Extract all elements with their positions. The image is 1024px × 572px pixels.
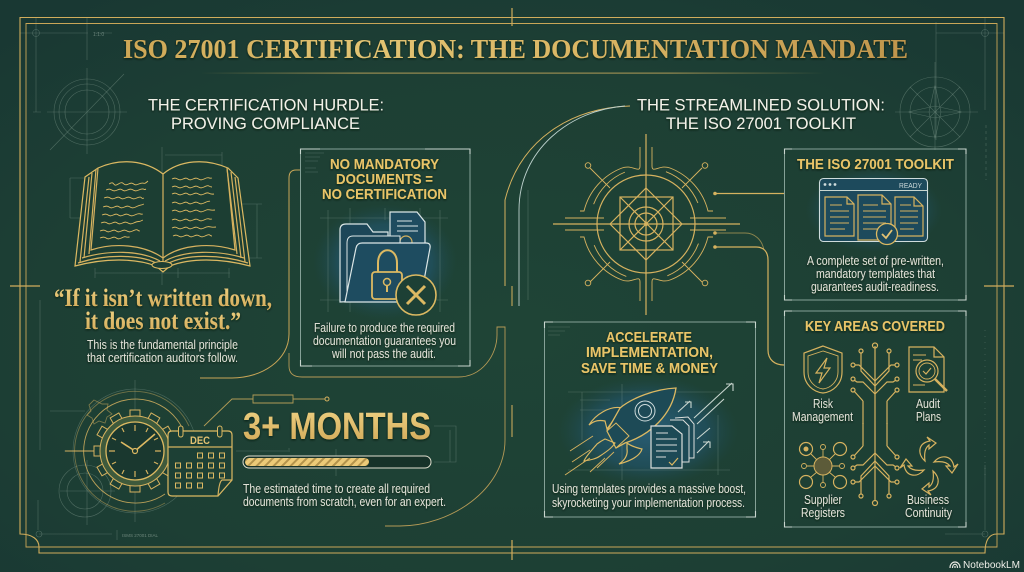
toolkit body text: A complete set of pre-written, (807, 254, 944, 268)
heading: streamlined solution: THE ISO 27001 TOOLKIT (666, 114, 856, 133)
accelerate body text (552, 482, 746, 510)
accelerate heading: SAVE TIME & MONEY (581, 360, 718, 377)
connector lines (200, 106, 784, 526)
quote: it does not exist.” (85, 308, 241, 335)
icon: audit document (909, 347, 947, 392)
icon: gear clock (64, 380, 205, 522)
toolkit body text (807, 254, 944, 294)
heading: certification hurdle: THE CERTIFICATION HURDLE: (148, 96, 384, 114)
label: audit plans (916, 397, 941, 424)
label: supplier registers: Supplier (804, 493, 842, 507)
circuit tree (851, 343, 899, 506)
icon: document window: READY (899, 183, 922, 190)
label: audit plans: Audit (916, 397, 940, 411)
icon: calendar DEC: DEC (190, 435, 210, 447)
label: risk management: Management (792, 410, 853, 424)
panel heading (322, 156, 447, 203)
toolkit heading: THE ISO 27001 TOOLKIT (797, 156, 954, 173)
toolkit body text: guarantees audit-readiness. (811, 280, 939, 294)
heading: streamlined solution (637, 96, 885, 133)
icon: supplier network (800, 442, 846, 488)
stat caption: documents from scratch, even for an expert. (243, 495, 446, 509)
panel: toolkit (784, 149, 966, 300)
accelerate heading (581, 329, 718, 377)
title: ISO 27001 CERTIFICATION: THE DOCUMENTATION MANDATE (123, 34, 908, 64)
panel: no mandatory documents (300, 149, 470, 366)
panel: accelerate (544, 322, 756, 517)
label: business continuity: Continuity (905, 506, 953, 520)
big number: 3+ MONTHS (243, 406, 431, 448)
decorative blueprint layer: 1:1:0 (93, 32, 104, 38)
stat caption: The estimated time to create all required (243, 482, 430, 496)
toolkit body text: mandatory templates that (816, 267, 935, 281)
stat caption (243, 482, 446, 509)
key areas heading: KEY AREAS COVERED (805, 318, 945, 335)
icon: document window (806, 168, 942, 252)
label: risk management: Risk (813, 397, 834, 411)
label: supplier registers: Registers (801, 506, 845, 520)
panel heading: NO MANDATORY (330, 156, 439, 173)
icon: circuit emblem (553, 134, 740, 315)
icon: continuity cycle (900, 437, 958, 495)
accelerate heading: IMPLEMENTATION, (586, 344, 713, 361)
label: supplier registers (801, 493, 845, 520)
icon: shield (804, 346, 842, 393)
panel body text (313, 321, 456, 361)
title rule (200, 73, 825, 74)
icon: open book (70, 147, 262, 285)
label: audit plans: Plans (916, 410, 941, 424)
icon: rocket and documents (558, 376, 738, 486)
quote caption (87, 338, 238, 365)
label: business continuity (905, 493, 953, 520)
quote caption: that certification auditors follow. (87, 351, 238, 365)
quote (54, 285, 272, 335)
heading: certification hurdle: PROVING COMPLIANCE (171, 114, 360, 133)
icon: locked folder with cross (313, 204, 457, 320)
progress bar (243, 456, 431, 468)
panel heading: DOCUMENTS = (336, 171, 433, 188)
heading: streamlined solution: THE STREAMLINED SOLUTION: (637, 96, 885, 114)
icon: calendar DEC (168, 426, 232, 496)
panel heading: NO CERTIFICATION (322, 186, 447, 203)
quote caption: This is the fundamental principle (87, 338, 238, 352)
panel body text: Failure to produce the required (314, 321, 455, 335)
label: business continuity: Business (907, 493, 949, 507)
panel body text: documentation guarantees you (313, 334, 456, 348)
quote: “If it isn’t written down, (54, 285, 272, 312)
accelerate body text: Using templates provides a massive boost, (552, 482, 746, 496)
panel body text: will not pass the audit. (331, 347, 436, 361)
decorative blueprint layer: ISMS 27001 DIAL (122, 533, 159, 538)
heading: certification hurdle (148, 96, 384, 133)
panel: key areas (784, 311, 966, 527)
accelerate heading: ACCELERATE (606, 329, 692, 346)
stat: 3+ months (204, 395, 456, 509)
accelerate body text: skyrocketing your implementation process. (552, 496, 745, 510)
watermark: NotebookLM: NotebookLM (963, 559, 1020, 571)
label: risk management (792, 397, 853, 424)
